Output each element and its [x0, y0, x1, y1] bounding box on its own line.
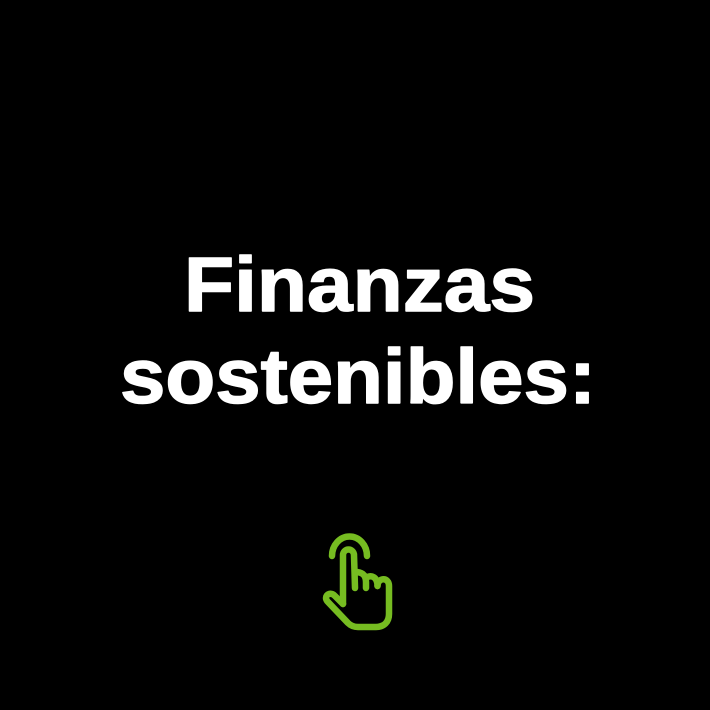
icon: pointing hand	[326, 536, 389, 627]
title	[120, 242, 596, 420]
title: sostenibles:	[120, 334, 596, 420]
title: Finanzas	[184, 242, 535, 328]
